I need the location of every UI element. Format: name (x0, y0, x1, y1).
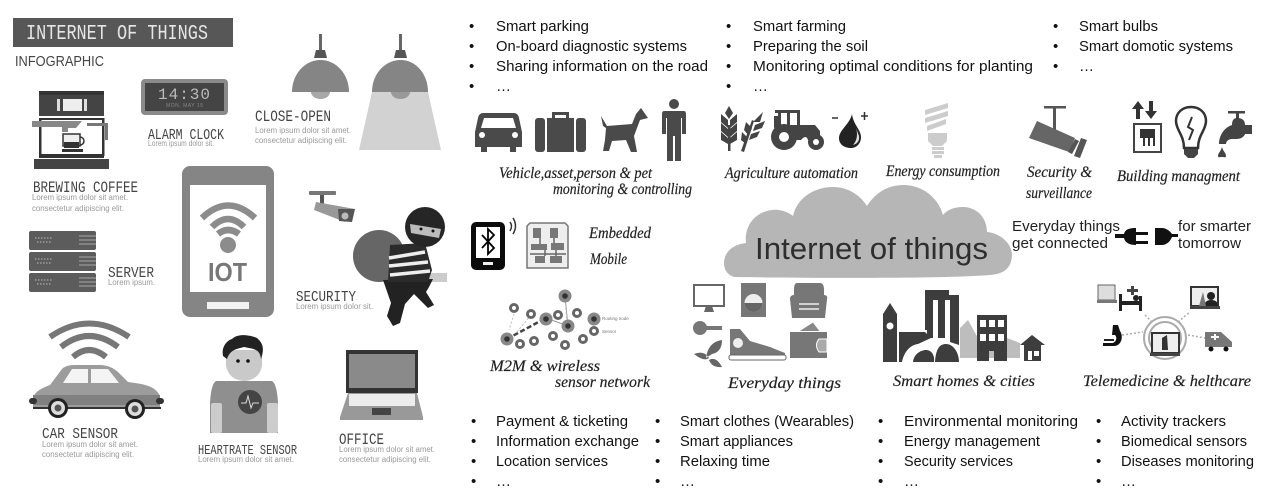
bullet list: environment: • (878, 453, 883, 470)
bullet list: wearables: • (655, 473, 660, 490)
icon: person (662, 99, 686, 161)
bullet list: wearables: … (680, 473, 695, 490)
tagline right (1178, 219, 1251, 252)
icon: plug (1115, 228, 1178, 245)
bullet list: vehicle: • (469, 38, 474, 55)
bullet list: agriculture: Preparing the soil (753, 38, 868, 55)
bullet list: environment: • (878, 473, 883, 490)
icon: laptop (340, 350, 423, 420)
bullet list: health: Diseases monitoring (1121, 453, 1254, 470)
label: security and surveillance: Security & (1027, 164, 1093, 181)
label: car sensor (42, 426, 138, 459)
bullet list: agriculture: • (726, 78, 731, 95)
bullet list: payments: Information exchange (496, 433, 639, 450)
label: everyday things: Everyday things (727, 375, 841, 392)
bullet list: energy (1053, 18, 1233, 75)
icon: circuit chip (527, 223, 568, 268)
label: close-open: Lorem ipsum dolor sit amet. (255, 126, 351, 135)
label: brewing coffee (32, 179, 138, 213)
tagline right: tomorrow (1178, 236, 1242, 252)
cloud: Internet of things (755, 231, 988, 266)
label: office: Lorem ipsum dolor sit amet. (339, 445, 435, 454)
label: embedded and mobile: Embedded (588, 225, 652, 242)
bullet list: vehicle: On-board diagnostic systems (496, 38, 687, 55)
bullet list: agriculture: • (726, 58, 731, 75)
label: close-open: CLOSE-OPEN (255, 108, 331, 126)
cloud (724, 185, 1012, 278)
icon: IOT smartphone: IOT (208, 257, 247, 287)
label: server: Lorem ipsum. (108, 278, 155, 287)
bullet list: wearables: Smart clothes (Wearables) (680, 413, 854, 430)
label: heartrate sensor: Lorem ipsum dolor sit amet. (198, 455, 294, 464)
label: vehicle monitoring: Vehicle,asset,person & pet (499, 165, 652, 182)
label: car sensor: consectetur adipiscing elit. (42, 450, 134, 459)
tagline left: Everyday things (1012, 219, 1120, 235)
label: M2M: sensor network (555, 374, 651, 391)
icon: thief (353, 207, 447, 326)
icon: wheat (721, 106, 765, 152)
icon: bluetooth phone (471, 218, 516, 270)
bullet list: health: … (1121, 473, 1136, 490)
bullet list: health: Biomedical sensors (1121, 433, 1247, 450)
bullet list: health: • (1096, 453, 1101, 470)
label: M2M (489, 358, 651, 391)
bullet list: vehicle: • (469, 78, 474, 95)
icon: suitcase (535, 112, 586, 152)
icon: open lamp (359, 34, 441, 150)
label: M2M: M2M & wireless (489, 358, 600, 375)
icon: tractor (771, 110, 824, 150)
bullet list: vehicle (469, 18, 708, 95)
bullet list: energy: Smart domotic systems (1079, 38, 1233, 55)
label: security: Lorem ipsum dolor sit. (296, 302, 373, 311)
bullet list: environment: • (878, 413, 883, 430)
bullet list: vehicle: Sharing information on the road (496, 58, 708, 75)
diagram: M2M wireless sensor network (500, 290, 629, 348)
bullet list: payments: Payment & ticketing (496, 413, 628, 430)
bullet list: health: Activity trackers (1121, 413, 1226, 430)
icon: security camera (309, 191, 355, 222)
icon: elevator (1132, 101, 1161, 152)
label: alarm clock (148, 127, 224, 148)
label: server: SERVER (108, 265, 154, 282)
bullet list: wearables: • (655, 433, 660, 450)
bullet list: wearables: • (655, 453, 660, 470)
icon: tap (1218, 111, 1252, 157)
bullet list: health: • (1096, 433, 1101, 450)
label: car sensor: CAR SENSOR (42, 426, 118, 443)
icon: dog (601, 108, 648, 152)
label: security and surveillance: surveillance (1026, 185, 1092, 202)
bullet list: wearables: Smart appliances (680, 433, 793, 450)
bullet list: wearables: Relaxing time (680, 453, 770, 470)
icon: alarm clock: 14:30 (158, 86, 210, 104)
label: smart homes: Smart homes & cities (893, 373, 1035, 390)
subtitle: INFOGRAPHIC (15, 53, 104, 70)
icon: alarm clock: MON, MAY 15 (166, 103, 203, 109)
icon: water drop (832, 112, 868, 148)
bullet list: health: • (1096, 473, 1101, 490)
label: embedded and mobile (588, 225, 652, 268)
label: security: SECURITY (296, 289, 356, 306)
diagram: M2M wireless sensor network: Sensor (602, 329, 617, 334)
icon: heartrate person (210, 335, 278, 433)
tagline right: for smarter (1178, 219, 1251, 235)
label: brewing coffee: Lorem ipsum dolor sit amet. (32, 193, 128, 202)
bullet list: agriculture: • (726, 38, 731, 55)
label: building: Building managment (1117, 168, 1241, 185)
bullet list: payments (471, 413, 639, 490)
bullet list: payments: • (471, 433, 476, 450)
bullet list: agriculture: … (753, 78, 768, 95)
label: close-open: consectetur adipiscing elit. (255, 136, 347, 145)
icon: car front (475, 113, 522, 152)
icon: IOT smartphone (182, 166, 274, 317)
label: alarm clock: ALARM CLOCK (148, 127, 224, 144)
title banner: INTERNET OF THINGS (26, 23, 208, 46)
label: alarm clock: Lorem ipsum dolor sit. (148, 139, 214, 148)
icon: server (29, 231, 96, 292)
label: heartrate sensor (198, 443, 297, 464)
bullet list: vehicle: • (469, 18, 474, 35)
label: office: OFFICE (339, 431, 384, 449)
label: office: consectetur adipiscing elit. (339, 455, 431, 464)
label: agriculture: Agriculture automation (724, 165, 858, 182)
icons: smart homes and cities (883, 290, 1045, 362)
title banner (13, 18, 233, 47)
label: server (108, 265, 155, 287)
label: telemedicine: Telemedicine & helthcare (1083, 373, 1251, 390)
label: office (339, 431, 435, 464)
icon: car with wifi (29, 324, 164, 419)
bullet list: environment: … (904, 473, 919, 490)
bullet list: energy: … (1079, 58, 1094, 75)
bullet list: vehicle: • (469, 58, 474, 75)
bullet list: payments: • (471, 473, 476, 490)
bullet list: payments: • (471, 453, 476, 470)
bullet list: health: • (1096, 413, 1101, 430)
bullet list: environment: Security services (904, 453, 1013, 470)
tagline left: get connected (1012, 236, 1108, 252)
bullet list: payments: … (496, 473, 511, 490)
bullet list: payments: Location services (496, 453, 608, 470)
bullet list: wearables: • (655, 413, 660, 430)
bullet list: agriculture: Smart farming (753, 18, 846, 35)
bullet list: agriculture: • (726, 18, 731, 35)
label: vehicle monitoring (499, 165, 692, 198)
bullet list: energy: Smart bulbs (1079, 18, 1158, 35)
diagram: M2M wireless sensor network: Routing node (602, 316, 629, 321)
label: close-open (255, 108, 351, 145)
bullet list: environment (878, 413, 1078, 490)
bullet list: vehicle: Smart parking (496, 18, 589, 35)
bullet list: agriculture (726, 18, 1033, 95)
bullet list: energy: • (1053, 38, 1058, 55)
bullet list: health (1096, 413, 1254, 490)
bullet list: vehicle: … (496, 78, 511, 95)
bullet list: environment: Energy management (904, 433, 1041, 450)
bullet list: environment: Environmental monitoring (904, 413, 1078, 430)
bullet list: agriculture: Monitoring optimal conditions for planting (753, 58, 1033, 75)
label: energy: Energy consumption (885, 163, 1000, 180)
label: vehicle monitoring: monitoring & controlling (553, 181, 692, 198)
bullet list: energy: • (1053, 18, 1058, 35)
label: security and surveillance (1026, 164, 1093, 202)
bullet list: wearables (655, 413, 854, 490)
bullet list: payments: • (471, 413, 476, 430)
label: heartrate sensor: HEARTRATE SENSOR (198, 443, 297, 459)
icons: everyday things (693, 283, 827, 367)
icon: idea bulb (1176, 107, 1206, 158)
icon: surveillance camera (1029, 106, 1087, 158)
label: brewing coffee: consectetur adipiscing elit. (32, 204, 124, 213)
icon: closed lamp (292, 34, 349, 99)
icon: coffee machine (32, 91, 109, 169)
label: car sensor: Lorem ipsum dolor sit amet. (42, 440, 138, 449)
bullet list: energy: • (1053, 58, 1058, 75)
label: brewing coffee: BREWING COFFEE (33, 179, 138, 197)
icon: alarm clock (141, 79, 228, 115)
icon: energy bulb (925, 103, 948, 158)
icons: telemedicine (1097, 285, 1232, 359)
tagline left (1012, 219, 1120, 252)
bullet list: environment: • (878, 433, 883, 450)
label: embedded and mobile: Mobile (589, 251, 627, 268)
